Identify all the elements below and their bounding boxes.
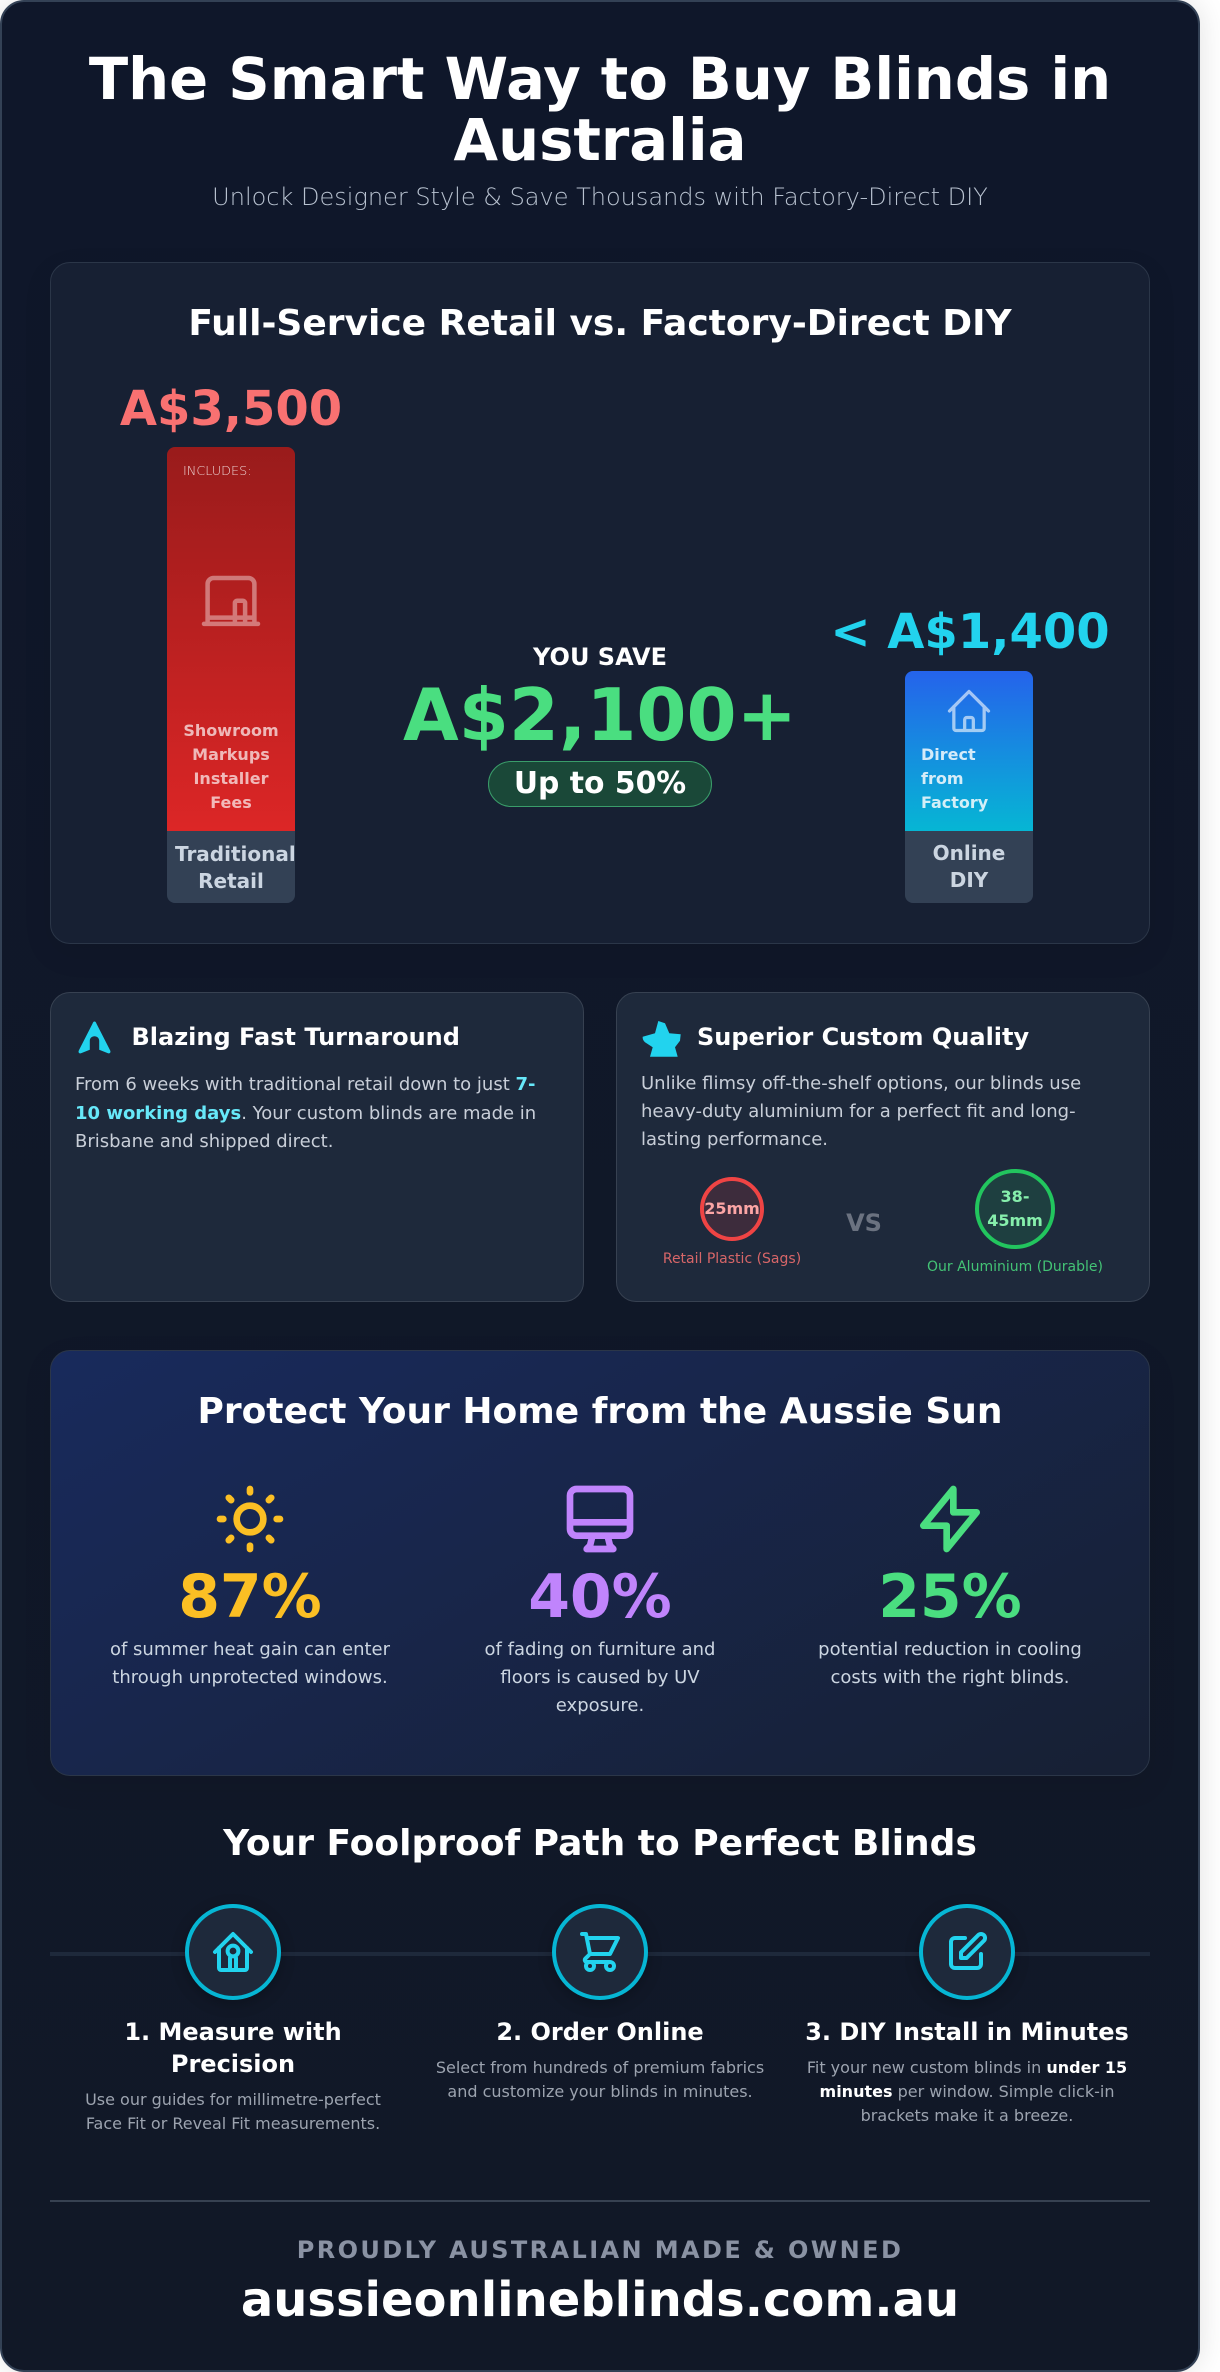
diy bar text: Factory xyxy=(921,793,988,812)
step 1 title: Precision xyxy=(171,2050,295,2078)
stat text: of summer heat gain can enter xyxy=(110,1639,390,1660)
card heading: Superior Custom Quality xyxy=(697,1023,1029,1051)
card body xyxy=(75,1074,536,1152)
retail price: A$3,500 xyxy=(120,381,342,437)
savings amount: A$2,100+ xyxy=(403,672,797,756)
card body: Unlike flimsy off-the-shelf options, our blinds use xyxy=(641,1072,1081,1094)
icon: monitor xyxy=(566,1486,634,1552)
step 3 description: brackets make it a breeze. xyxy=(861,2106,1073,2125)
icon: rocket xyxy=(78,1022,110,1054)
icon: home with pin xyxy=(212,1932,254,1972)
step 3 text xyxy=(805,2018,1129,2125)
38-45mm aluminium comparison xyxy=(927,1169,1103,1275)
step 1 description: Use our guides for millimetre-perfect xyxy=(85,2090,381,2109)
retail bar xyxy=(167,447,295,831)
retail bar label xyxy=(167,831,295,903)
25mm retail comparison xyxy=(663,1177,801,1267)
icon: storefront xyxy=(202,576,260,626)
step 2 text xyxy=(436,2018,764,2101)
timeline line xyxy=(50,1952,1150,1956)
stat text xyxy=(485,1639,715,1716)
stat text: exposure. xyxy=(556,1695,644,1716)
circle: 38-45mm: 45mm xyxy=(987,1211,1043,1230)
sun heading: Protect Your Home from the Aussie Sun xyxy=(197,1390,1003,1432)
title xyxy=(89,46,1111,174)
card body: 10 working days. Your custom blinds are made in xyxy=(75,1103,536,1124)
title: The Smart Way to Buy Blinds in xyxy=(89,46,1111,113)
icon: cart xyxy=(580,1932,620,1972)
stat value: 87% xyxy=(178,1562,322,1632)
stat value: 40% xyxy=(528,1562,672,1632)
stat: heat gain xyxy=(110,1486,390,1688)
step 2 description xyxy=(436,2058,764,2101)
caption: our aluminium: Our Aluminium (Durable) xyxy=(927,1259,1103,1275)
savings pill xyxy=(488,761,712,807)
footer website: aussieonlineblinds.com.au xyxy=(241,2272,959,2328)
caption: retail plastic: Retail Plastic (Sags) xyxy=(663,1251,801,1267)
step 1 text xyxy=(85,2018,381,2133)
diy bar text: from xyxy=(921,769,964,788)
vs label: VS xyxy=(846,1209,882,1237)
panel: blazing fast turnaround xyxy=(50,992,584,1302)
diy bar xyxy=(905,671,1033,831)
comparison heading: Full-Service Retail vs. Factory-Direct DIY xyxy=(188,303,1012,344)
card body: Brisbane and shipped direct. xyxy=(75,1131,333,1152)
retail cost items: Showroom xyxy=(183,721,279,740)
step 1 title xyxy=(124,2018,342,2078)
stat text xyxy=(818,1639,1082,1688)
panel: sun protection xyxy=(50,1350,1150,1776)
stat text: of fading on furniture and xyxy=(485,1639,715,1660)
step 2 description: and customize your blinds in minutes. xyxy=(447,2082,753,2101)
diy bar text: Direct xyxy=(921,745,976,764)
circle: 38-45mm: 38- xyxy=(1001,1187,1029,1206)
diy bar text xyxy=(921,745,988,812)
retail cost items xyxy=(183,721,279,812)
icon: sun xyxy=(216,1486,284,1552)
step 3 description xyxy=(807,2058,1127,2125)
step circle 2 xyxy=(552,1904,648,2000)
stat: fading xyxy=(485,1486,715,1716)
circle: 25mm: 25mm xyxy=(704,1199,760,1218)
card body: lasting performance. xyxy=(641,1129,828,1150)
step circle 3 xyxy=(919,1904,1015,2000)
stat text: costs with the right blinds. xyxy=(830,1667,1069,1688)
card body: heavy-duty aluminium for a perfect fit and long- xyxy=(641,1101,1076,1122)
retail cost items: Markups xyxy=(192,745,270,764)
includes label: INCLUDES: xyxy=(183,464,252,479)
subtitle: Unlock Designer Style & Save Thousands with Factory-Direct DIY xyxy=(212,183,988,211)
card heading: Blazing Fast Turnaround xyxy=(132,1023,460,1051)
savings pill: Up to 50% xyxy=(514,766,686,801)
title: Australia xyxy=(453,106,747,174)
stat: cooling costs xyxy=(818,1486,1082,1688)
stat text xyxy=(110,1639,390,1688)
savings callout xyxy=(403,643,797,807)
label text: Traditional xyxy=(175,842,296,866)
header xyxy=(89,46,1111,211)
label text xyxy=(175,842,296,893)
step 2 description: Select from hundreds of premium fabrics xyxy=(436,2058,764,2077)
stat text: potential reduction in cooling xyxy=(818,1639,1082,1660)
footer tagline: PROUDLY AUSTRALIAN MADE & OWNED xyxy=(297,2236,903,2264)
stat value: 25% xyxy=(878,1562,1022,1632)
you save label: YOU SAVE xyxy=(533,643,667,671)
timeline xyxy=(50,1904,1150,2000)
step circle 1 xyxy=(185,1904,281,2000)
diy bar label: DIY xyxy=(950,868,988,892)
path heading: Your Foolproof Path to Perfect Blinds xyxy=(223,1823,977,1864)
diy bar label xyxy=(905,831,1033,903)
circle: 38-45mm xyxy=(975,1169,1055,1249)
icon: house xyxy=(948,690,990,732)
panel: superior custom quality xyxy=(616,992,1150,1302)
diy price: < A$1,400 xyxy=(830,604,1110,660)
circle: 25mm xyxy=(700,1177,764,1241)
step 3 description: Fit your new custom blinds in under 15 xyxy=(807,2058,1127,2077)
retail cost items: Installer xyxy=(193,769,269,788)
step 1 title: 1. Measure with xyxy=(124,2018,342,2046)
card body: From 6 weeks with traditional retail down to just 7- xyxy=(75,1074,535,1095)
icon: pencil square xyxy=(949,1932,988,1970)
step 1 description xyxy=(85,2090,381,2133)
label text: Retail xyxy=(198,869,264,893)
stat text: floors is caused by UV xyxy=(500,1667,700,1688)
stat text: through unprotected windows. xyxy=(112,1667,388,1688)
retail cost items: Fees xyxy=(210,793,252,812)
diy bar label: Online xyxy=(933,840,1005,864)
step 3 title: 3. DIY Install in Minutes xyxy=(805,2018,1129,2046)
panel: price comparison xyxy=(50,262,1150,944)
icon: star xyxy=(642,1021,681,1057)
step 1 description: Face Fit or Reveal Fit measurements. xyxy=(86,2114,380,2133)
step 3 description: minutes per window. Simple click-in xyxy=(820,2082,1114,2101)
footer xyxy=(50,2200,1150,2340)
step 2 title: 2. Order Online xyxy=(496,2018,704,2046)
icon: lightning bolt xyxy=(920,1486,980,1552)
card body xyxy=(641,1072,1081,1150)
